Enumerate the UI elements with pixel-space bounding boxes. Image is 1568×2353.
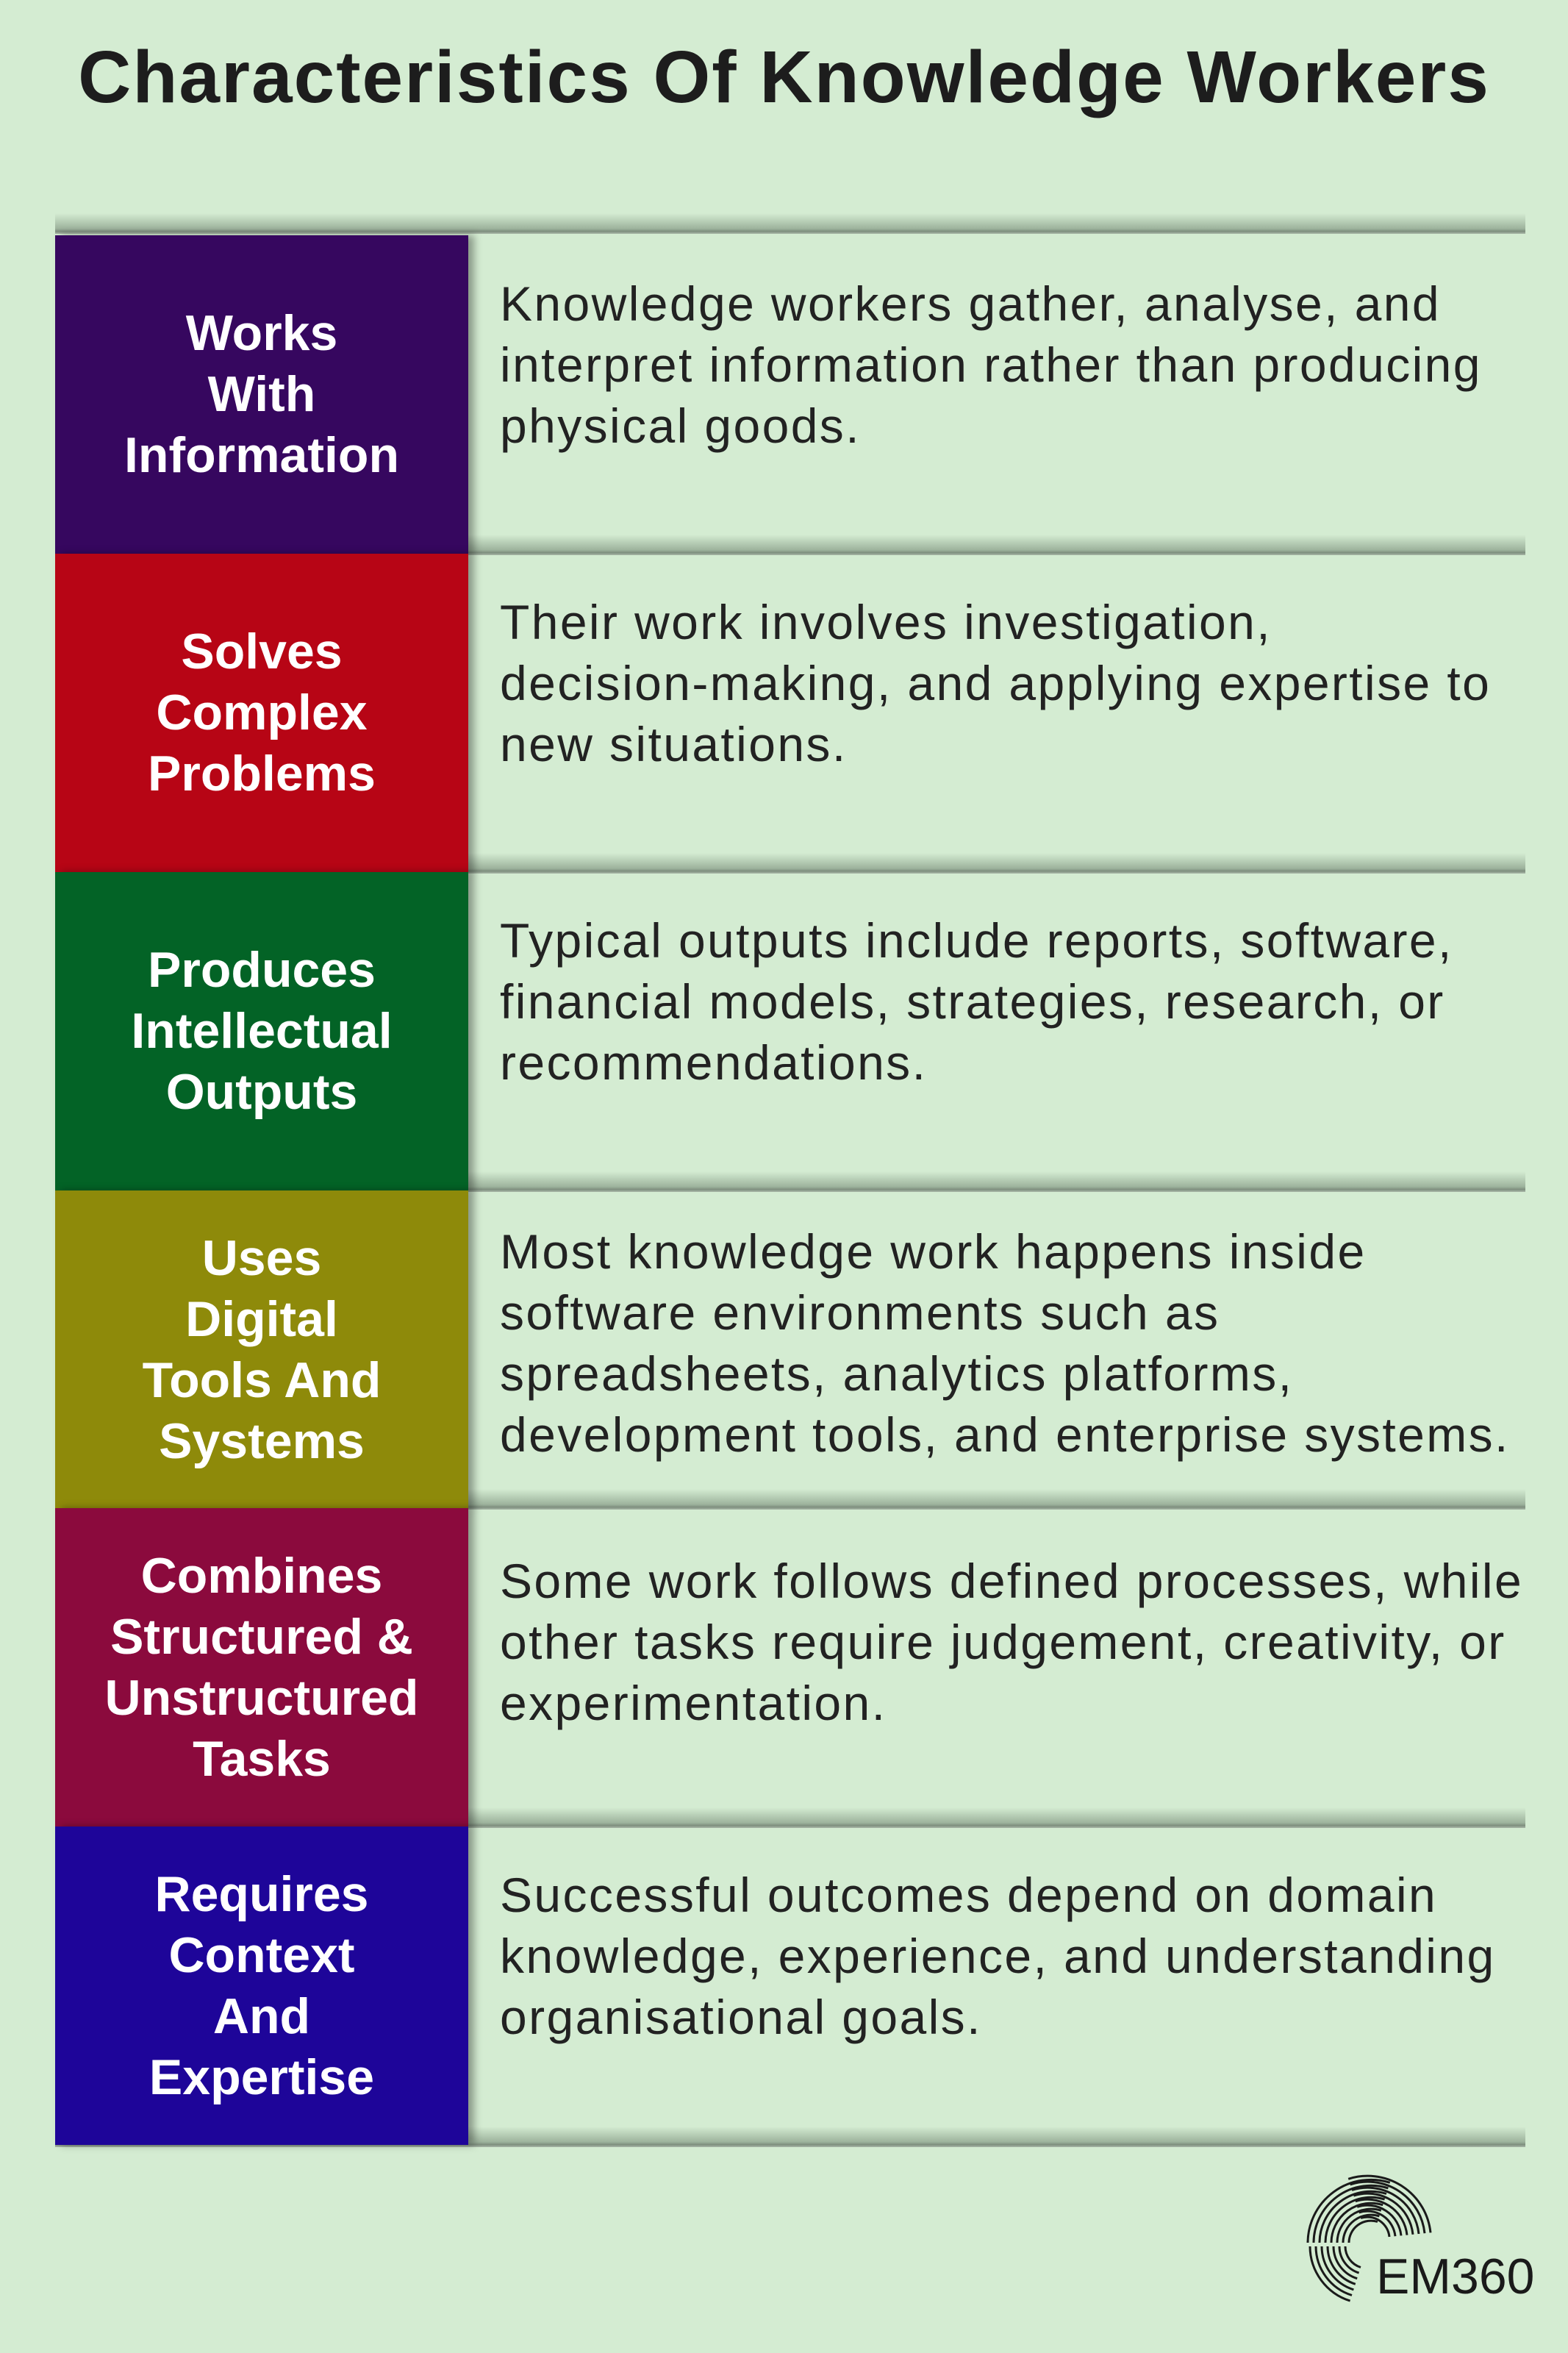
text: combines structured: other tasks require judgement, creativity, or <box>500 1615 1506 1669</box>
text: uses digital tools <box>500 1224 1510 1462</box>
label: combines structured <box>55 1508 468 1827</box>
text: produces intellectual outputs <box>500 913 1453 1090</box>
label: produces intellectual outputs: Produces <box>148 942 376 998</box>
logo: EM360 <box>1307 2175 1534 2304</box>
label: requires context: Expertise <box>149 2049 374 2104</box>
label: solves complex problems: Problems <box>148 746 376 801</box>
text: requires context <box>500 1868 1496 2044</box>
panel: produces intellectual outputs <box>55 868 1453 1194</box>
logo text: EM360 <box>1376 2249 1534 2304</box>
label: produces intellectual outputs: Outputs <box>166 1064 357 1120</box>
label: combines structured: Unstructured <box>105 1669 418 1725</box>
text: solves complex problems: Their work involves investigation, <box>500 595 1272 649</box>
label: combines structured: Combines <box>141 1547 382 1603</box>
text: uses digital tools: development tools, and enterprise systems. <box>500 1407 1510 1462</box>
text: combines structured: experimentation. <box>500 1676 887 1730</box>
label: requires context: Requires <box>154 1866 368 1922</box>
label: combines structured: Tasks <box>193 1731 331 1787</box>
text: requires context: knowledge, experience, and understanding <box>500 1929 1496 1983</box>
text: uses digital tools: software environments such as <box>500 1285 1220 1340</box>
title: Characteristics Of Knowledge Workers <box>78 36 1490 118</box>
label: produces intellectual outputs <box>55 872 468 1190</box>
panel: works with information <box>55 232 1482 557</box>
text: works with information: physical goods. <box>500 399 861 453</box>
text: combines structured: Some work follows defined processes, while <box>500 1554 1523 1608</box>
text: combines structured <box>500 1554 1523 1730</box>
panel: uses digital tools <box>55 1187 1510 1513</box>
label: works with information: Information <box>124 427 399 483</box>
text: works with information: interpret information rather than producing <box>500 338 1482 392</box>
label: solves complex problems: Complex <box>156 685 368 740</box>
panel: requires context <box>55 1823 1496 2150</box>
label: uses digital tools: Systems <box>159 1413 365 1469</box>
label: uses digital tools: Digital <box>185 1291 338 1347</box>
icon: swirl <box>1307 2175 1432 2302</box>
label: produces intellectual outputs: Intellectual <box>131 1003 393 1059</box>
label: uses digital tools <box>55 1190 468 1509</box>
text: solves complex problems: new situations. <box>500 717 848 771</box>
text: uses digital tools: spreadsheets, analytics platforms, <box>500 1346 1293 1401</box>
panel: combines structured <box>55 1504 1523 1831</box>
text: works with information <box>500 276 1482 453</box>
label: works with information <box>55 235 468 554</box>
label: solves complex problems <box>55 554 468 872</box>
label: works with information: With <box>208 366 315 422</box>
label: uses digital tools: Uses <box>202 1229 321 1285</box>
text: works with information: Knowledge workers gather, analyse, and <box>500 276 1441 331</box>
label: requires context <box>55 1827 468 2145</box>
text: produces intellectual outputs: financial models, strategies, research, or <box>500 974 1445 1029</box>
panel: solves complex problems <box>55 550 1491 876</box>
label: uses digital tools: Tools And <box>143 1352 381 1407</box>
text: solves complex problems <box>500 595 1491 771</box>
label: works with information: Works <box>186 305 337 361</box>
text: requires context: Successful outcomes depend on domain <box>500 1868 1437 1922</box>
label: requires context: And <box>213 1988 310 2044</box>
text: produces intellectual outputs: recommendations. <box>500 1035 927 1090</box>
label: requires context: Context <box>168 1927 355 1982</box>
text: solves complex problems: decision-making, and applying expertise to <box>500 656 1491 710</box>
text: uses digital tools: Most knowledge work happens inside <box>500 1224 1367 1279</box>
text: produces intellectual outputs: Typical outputs include reports, software, <box>500 913 1453 968</box>
label: combines structured: Structured & <box>110 1609 413 1665</box>
text: requires context: organisational goals. <box>500 1990 982 2044</box>
label: solves complex problems: Solves <box>181 624 343 679</box>
